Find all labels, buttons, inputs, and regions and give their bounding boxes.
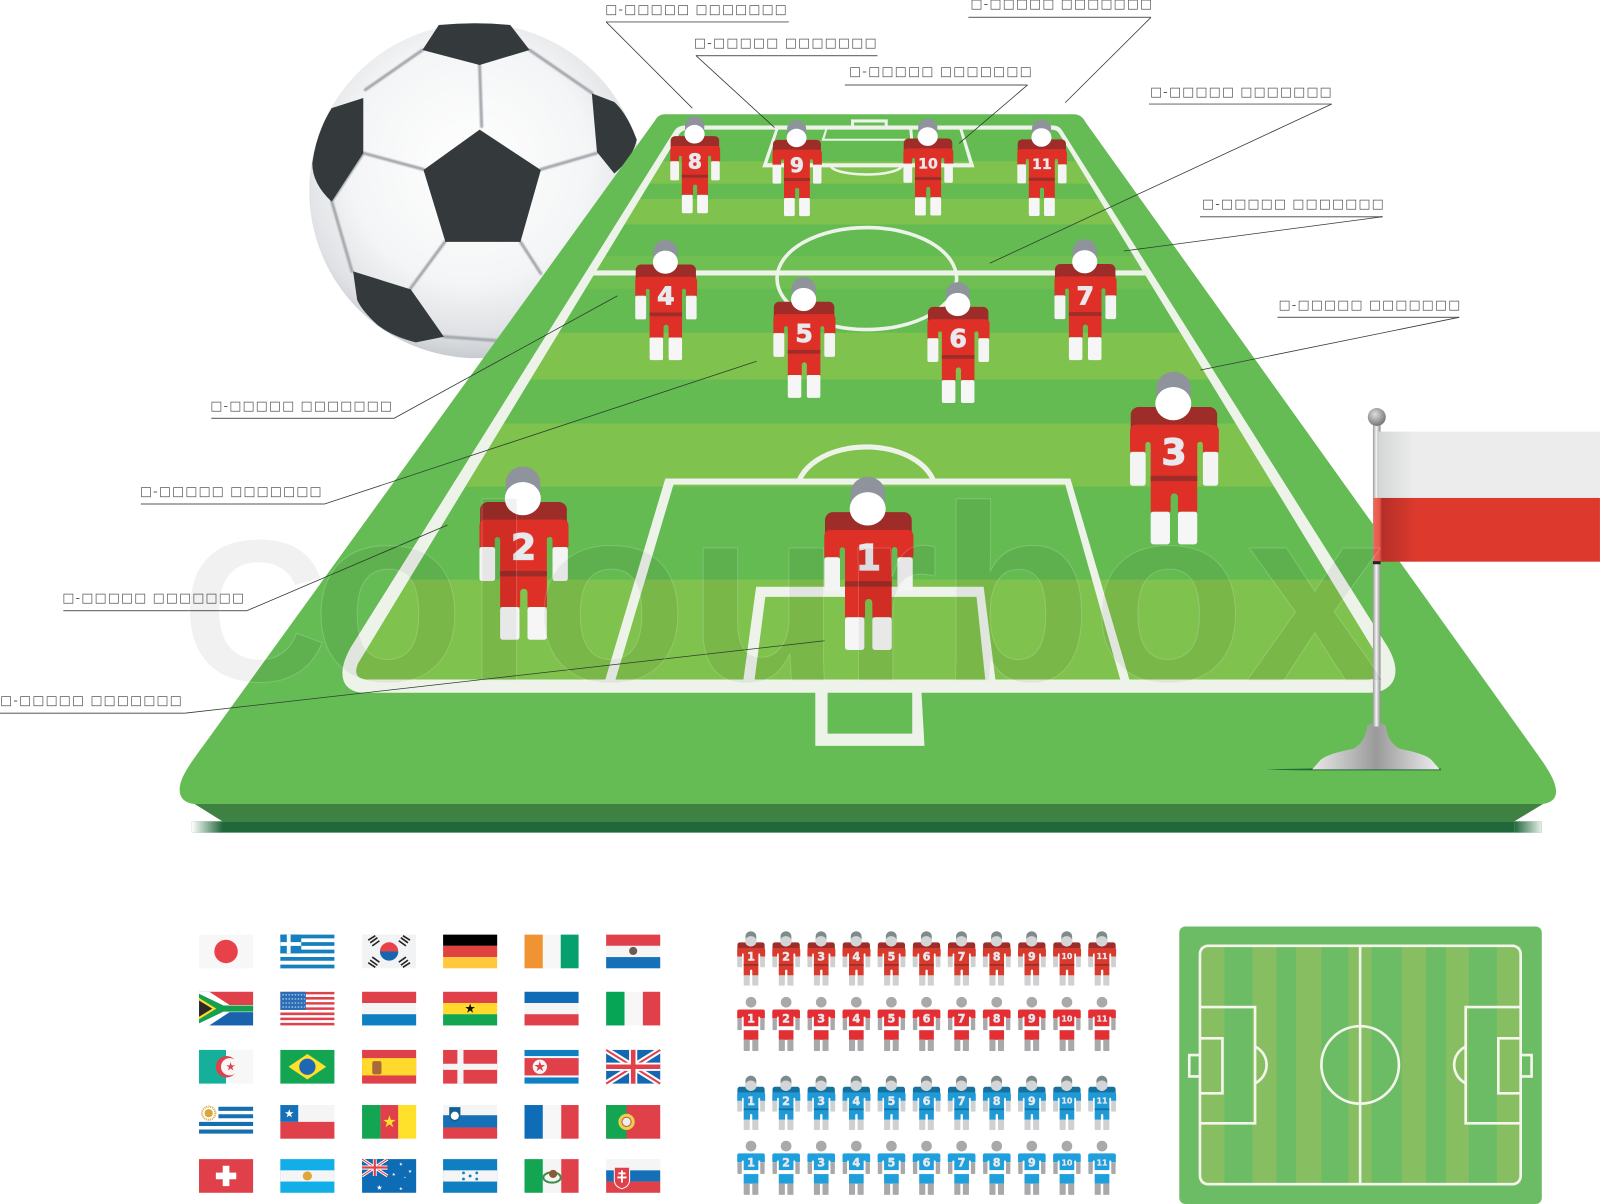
watermark: C xyxy=(182,498,328,724)
player icons: blue row 2: 5 xyxy=(887,1156,895,1169)
player 5: 5 xyxy=(795,319,813,348)
flag: Australia xyxy=(362,1159,416,1193)
label: player 5 xyxy=(140,361,757,504)
flag: Paraguay xyxy=(606,935,660,968)
player icons: red row 1: 8 xyxy=(993,951,1001,964)
player icons: blue row 1: 7 xyxy=(958,1095,966,1108)
player icons: red row 1: 5 xyxy=(887,951,895,964)
player icons: blue row 1: 2 xyxy=(782,1095,790,1108)
label: player 1 xyxy=(0,641,824,713)
player icons: blue row 1: 6 xyxy=(923,1095,931,1108)
player icons: blue row 1: 4 xyxy=(852,1095,860,1108)
flag: Cameroon xyxy=(362,1105,416,1139)
player 8 xyxy=(670,116,720,213)
player icons: red row 2: 8 xyxy=(993,1013,1001,1026)
player icons: blue row 2: 2 xyxy=(782,1156,790,1169)
label: player 8: □-□□□□□ □□□□□□□ xyxy=(605,2,787,17)
player 1: 1 xyxy=(856,538,881,579)
player 9 xyxy=(773,120,822,216)
label: player 4 xyxy=(210,296,617,418)
flag: Argentina xyxy=(280,1159,334,1193)
label: player 10: □-□□□□□ □□□□□□□ xyxy=(849,65,1032,80)
flag: Netherlands xyxy=(362,992,416,1025)
label: player 7 xyxy=(1124,197,1384,251)
player icons: blue row 2: 1 xyxy=(747,1156,755,1169)
player icons: red row 2: 1 xyxy=(747,1013,755,1026)
player icons: blue row 2: 3 xyxy=(817,1156,825,1169)
penalty arc near side xyxy=(797,444,936,478)
flag: Spain xyxy=(362,1050,416,1084)
flag: Denmark xyxy=(443,1050,497,1084)
player icons: blue row 1: 11 xyxy=(1096,1097,1108,1106)
flag: France xyxy=(525,1105,579,1139)
label: midfield right xyxy=(990,85,1332,263)
player icons: blue row 1: 8 xyxy=(993,1095,1001,1108)
player icons: red row 2: 10 xyxy=(1061,1014,1073,1023)
flags grid xyxy=(199,935,660,1193)
player icons: red row 1: 9 xyxy=(1028,951,1036,964)
player icons: blue row 1: 3 xyxy=(817,1095,825,1108)
player 7: 7 xyxy=(1076,281,1094,310)
player icons: blue row 2: 9 xyxy=(1028,1156,1036,1169)
player icons: blue row 2: 6 xyxy=(923,1156,931,1169)
player icons: red row 1: 1 xyxy=(747,951,755,964)
watermark: olourbox xyxy=(311,455,1385,735)
corner flag xyxy=(1265,408,1600,770)
label: player 3 xyxy=(1200,298,1460,370)
player 7 xyxy=(1054,239,1117,360)
label: player 9: □-□□□□□ □□□□□□□ xyxy=(694,36,877,51)
label: player 3: □-□□□□□ □□□□□□□ xyxy=(1279,298,1460,313)
player icons: red row 2: 4 xyxy=(852,1013,860,1026)
label: player 5: □-□□□□□ □□□□□□□ xyxy=(140,484,321,499)
player icons: blue row 2 xyxy=(737,1141,1116,1195)
player icons: red row 1: 10 xyxy=(1061,952,1073,961)
label: midfield right: □-□□□□□ □□□□□□□ xyxy=(1150,85,1332,100)
player 2 xyxy=(479,467,569,640)
label: player 1: □-□□□□□ □□□□□□□ xyxy=(0,694,182,709)
penalty arc far side xyxy=(830,167,903,176)
player icons: blue row 1: 9 xyxy=(1028,1095,1036,1108)
player 11: 11 xyxy=(1032,157,1052,173)
flag: Italy xyxy=(606,992,660,1025)
pitch markings xyxy=(342,119,1395,746)
player icons: red row 2 xyxy=(737,997,1116,1051)
player 9: 9 xyxy=(790,153,804,177)
centre circle xyxy=(777,228,957,330)
player icons: red row 1 xyxy=(737,931,1116,986)
flag: Algeria xyxy=(199,1050,253,1084)
player 3 xyxy=(1130,372,1219,544)
flag: Brazil xyxy=(280,1050,334,1084)
icon: soccer ball xyxy=(309,23,644,358)
flag: Greece xyxy=(280,935,334,968)
player icons: blue row 2: 11 xyxy=(1096,1158,1108,1167)
flag: USA xyxy=(280,992,334,1025)
label: player 4: □-□□□□□ □□□□□□□ xyxy=(210,399,392,414)
player icons: red row 1: 4 xyxy=(852,951,860,964)
flag: Mexico xyxy=(525,1159,579,1193)
label: player 11 xyxy=(968,0,1152,103)
player 1 xyxy=(824,477,913,650)
player 8: 8 xyxy=(688,149,702,173)
label: player 2 xyxy=(62,525,447,611)
player icons: blue row 2: 10 xyxy=(1061,1158,1073,1167)
label: player 8 xyxy=(605,2,789,108)
player icons: blue row 2: 8 xyxy=(993,1156,1001,1169)
player icons: red row 1: 7 xyxy=(958,951,966,964)
flag: Japan xyxy=(199,935,253,968)
flag: Germany xyxy=(443,935,497,968)
player icons: red row 2: 6 xyxy=(923,1013,931,1026)
flag: United Kingdom xyxy=(606,1050,660,1084)
flag: Uruguay xyxy=(199,1105,253,1139)
player icons: red row 2: 2 xyxy=(782,1013,790,1026)
player 4 xyxy=(635,240,697,360)
label: player 2: □-□□□□□ □□□□□□□ xyxy=(62,591,244,606)
player icons: blue row 2: 4 xyxy=(852,1156,860,1169)
player icons: red row 2: 3 xyxy=(817,1013,825,1026)
flag: Ghana xyxy=(443,992,497,1025)
player icons: red row 2: 11 xyxy=(1096,1014,1108,1023)
player 5 xyxy=(773,277,835,398)
flag: Slovakia xyxy=(606,1159,660,1193)
flag: Slovenia xyxy=(443,1105,497,1139)
player 11 xyxy=(1017,120,1067,216)
player icons: red row 1: 3 xyxy=(817,951,825,964)
player icons: red row 1: 2 xyxy=(782,951,790,964)
flag: South Africa xyxy=(199,992,253,1025)
player icons: blue row 1: 10 xyxy=(1061,1097,1073,1106)
player icons: red row 2: 5 xyxy=(887,1013,895,1026)
player 3: 3 xyxy=(1161,432,1186,473)
football field base xyxy=(180,114,1556,833)
flag: Ivory Coast xyxy=(525,935,579,968)
leader lines and labels xyxy=(0,0,1460,713)
flag: South Korea xyxy=(362,935,416,968)
player 2: 2 xyxy=(511,528,536,569)
player 4: 4 xyxy=(657,282,675,311)
flag: Portugal xyxy=(606,1105,660,1139)
player icons: blue row 2: 7 xyxy=(958,1156,966,1169)
player icons: blue row 1 xyxy=(737,1076,1116,1130)
player 10: 10 xyxy=(918,156,938,172)
flag: Serbia xyxy=(525,992,579,1025)
player icons: red row 1: 6 xyxy=(923,951,931,964)
label: player 7: □-□□□□□ □□□□□□□ xyxy=(1202,197,1384,212)
label: player 10 xyxy=(845,65,1032,143)
player 6: 6 xyxy=(949,324,967,353)
top-down pitch diagram xyxy=(1179,926,1542,1204)
pitch stripes xyxy=(347,130,1388,681)
player 6 xyxy=(927,282,990,403)
label: player 9 xyxy=(694,36,878,128)
player icons: blue row 1: 5 xyxy=(887,1095,895,1108)
player icons: red row 2: 9 xyxy=(1028,1013,1036,1026)
flag: Honduras xyxy=(443,1159,497,1193)
player icons: red row 1: 11 xyxy=(1096,952,1108,961)
player 10 xyxy=(903,119,953,216)
flag: Chile xyxy=(280,1105,334,1139)
flag: Switzerland xyxy=(199,1159,253,1193)
player icons: blue row 1: 1 xyxy=(747,1095,755,1108)
flag: North Korea xyxy=(525,1050,579,1084)
player icons: red row 2: 7 xyxy=(958,1013,966,1026)
